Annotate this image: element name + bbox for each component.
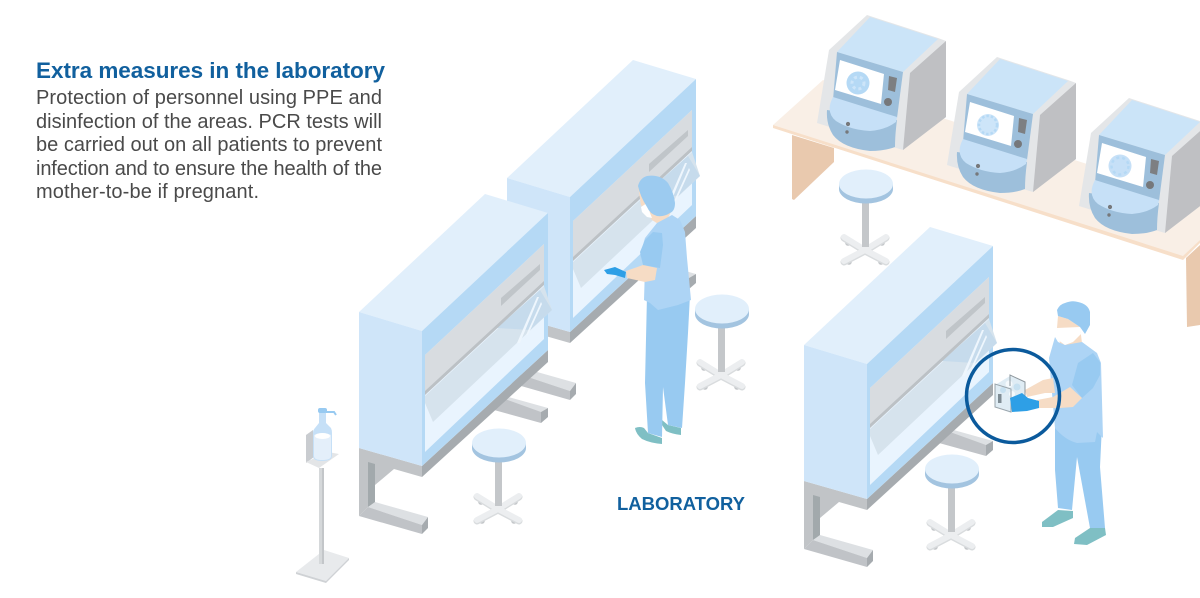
stool left: [472, 428, 526, 524]
person at back cabinet: [604, 176, 691, 444]
label: laboratory: LABORATORY: [617, 493, 746, 514]
safety cabinet right: [804, 227, 997, 567]
stool near bench: [839, 170, 893, 265]
glove: [1010, 393, 1039, 412]
safety cabinet back: [507, 60, 700, 400]
hand sanitiser dispenser: [296, 408, 349, 583]
title: Extra measures in the laboratory: [36, 58, 385, 83]
body text: disinfection of the areas. PCR tests will: [36, 111, 382, 133]
centrifuge 3: [1079, 98, 1200, 234]
tube rack: [995, 375, 1025, 413]
highlight circle: [966, 350, 1060, 442]
stool middle: [695, 294, 749, 390]
centrifuge 2: [947, 57, 1076, 193]
person holding rack: [1025, 301, 1106, 545]
body text: mother-to-be if pregnant.: [36, 181, 259, 203]
safety cabinet front left: [359, 194, 552, 534]
body text: infection and to ensure the health of the: [36, 158, 382, 180]
body text: [36, 87, 382, 203]
bench table with legs: [773, 80, 1200, 327]
body text: Protection of personnel using PPE and: [36, 87, 382, 109]
stool right: [925, 454, 979, 550]
body text: be carried out on all patients to prevent: [36, 134, 382, 156]
centrifuge 1: [817, 15, 946, 151]
